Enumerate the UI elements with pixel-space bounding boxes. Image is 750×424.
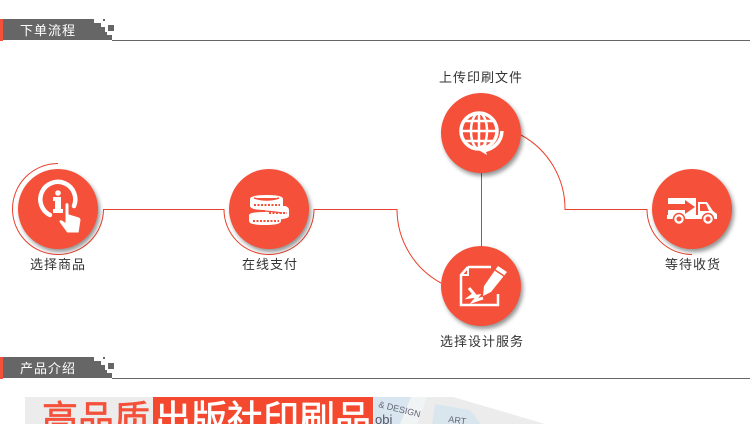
step 3: upload print files: [439, 70, 526, 179]
product banner image: [25, 397, 544, 424]
label: 选择商品: [30, 257, 86, 272]
step 2: pay online: [228, 169, 314, 272]
label: 选择设计服务: [440, 334, 524, 349]
step 1: choose product: [17, 169, 103, 272]
section header: product introduction: [0, 357, 750, 379]
icon: delivery truck: [652, 169, 732, 249]
step 5: await delivery: [651, 169, 737, 272]
label: 在线支付: [242, 257, 298, 272]
icon: coins: [229, 169, 309, 249]
section header: order process: [0, 19, 750, 41]
brochure photo: & DESIGN: [378, 399, 422, 419]
icon: document and pen: [441, 246, 521, 326]
section header: product introduction: 产品介绍: [20, 361, 76, 376]
label: 等待收货: [665, 257, 721, 272]
banner background: [25, 397, 153, 424]
brochure photo: [373, 397, 544, 424]
label: 上传印刷文件: [439, 70, 523, 85]
section header: order process: 下单流程: [20, 23, 76, 38]
icon: globe with arrow: [441, 93, 521, 173]
step 4: choose design service: [440, 246, 526, 349]
icon: info and pointing hand: [18, 169, 98, 249]
